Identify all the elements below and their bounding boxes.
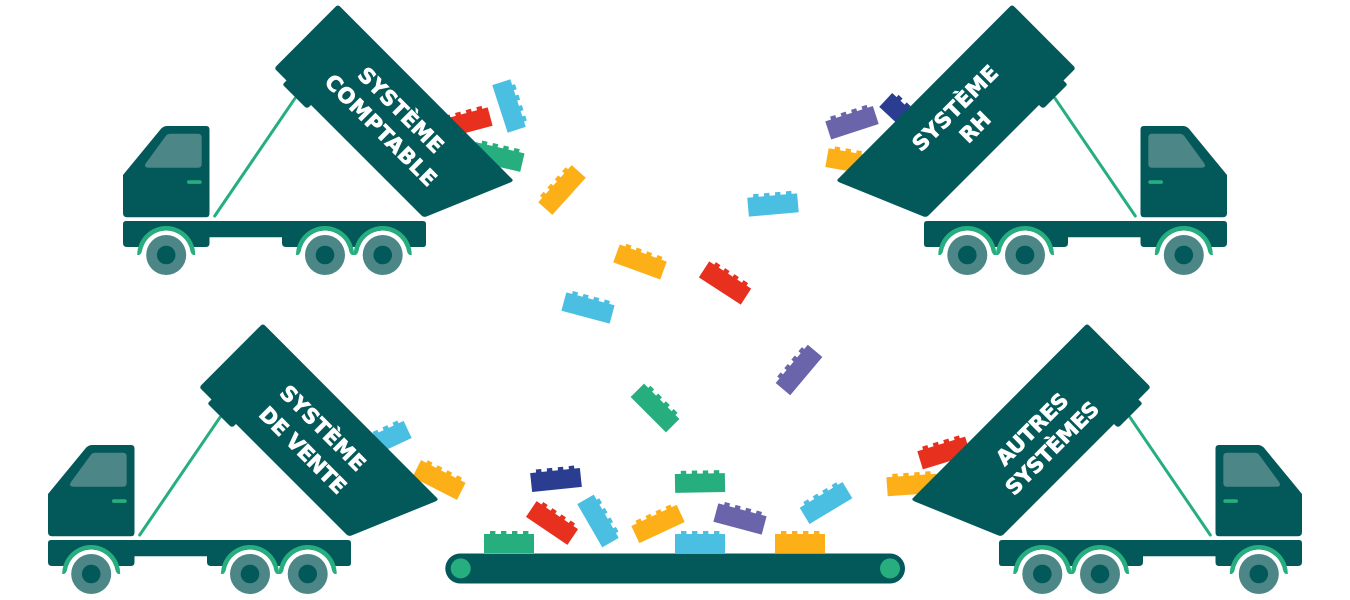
truck: système comptable: SYSTÈME <box>353 62 449 158</box>
truck: système RH <box>837 5 1227 279</box>
truck: système RH: RH <box>955 107 996 148</box>
truck: système de vente: DE VENTE <box>254 402 351 499</box>
truck: système de vente <box>48 324 438 598</box>
truck: autres systèmes: SYSTÈMES <box>1000 396 1104 500</box>
truck: système comptable: COMPTABLE <box>320 70 441 191</box>
bricks on conveyor <box>484 531 825 553</box>
conveyor belt <box>445 554 905 584</box>
truck: autres systèmes <box>912 324 1302 598</box>
truck: système comptable <box>123 5 513 279</box>
truck: autres systèmes: AUTRES <box>991 388 1073 470</box>
truck: système RH: SYSTÈME <box>907 60 1003 156</box>
truck: système de vente: SYSTÈME <box>275 380 371 476</box>
falling bricks <box>357 78 971 547</box>
